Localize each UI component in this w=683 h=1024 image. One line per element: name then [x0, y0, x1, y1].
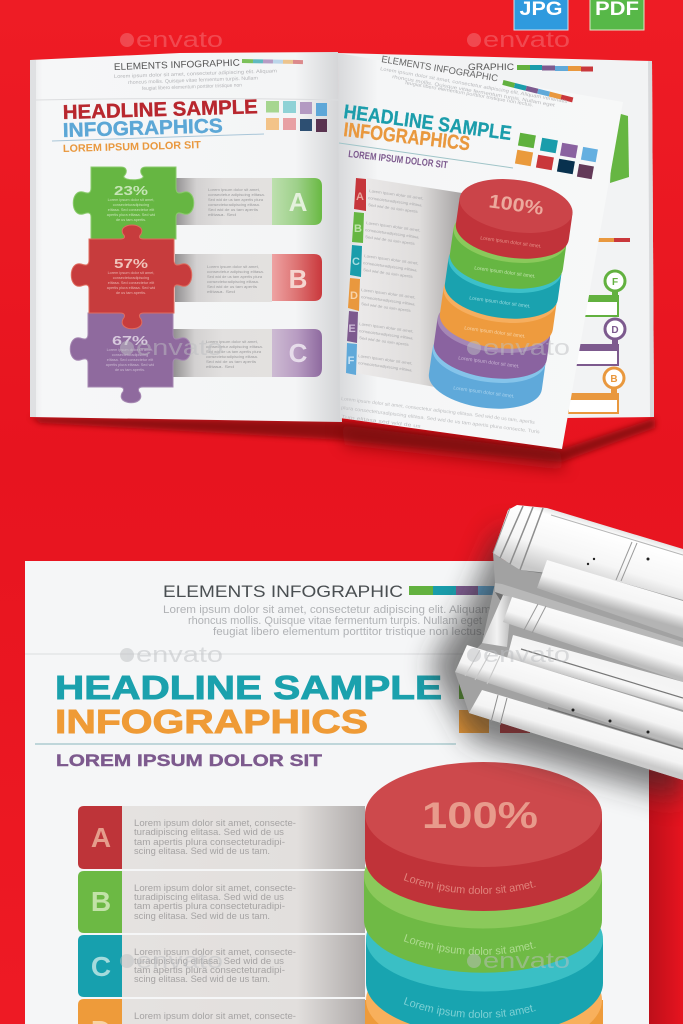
watermarks: [120, 27, 570, 52]
puzzle piece: purple 67%: de us tam apertis.: [115, 368, 145, 372]
layer purple: [430, 292, 554, 385]
row: B: turadipiscing elitasa. Sed wid de us: [134, 892, 284, 903]
watermarks lower: envato: [483, 335, 570, 360]
roll 2: [537, 560, 683, 638]
list rows text: Lorem ipsum dolor sit amet,: [361, 288, 416, 300]
callout B: [568, 368, 624, 413]
row: B: B: [91, 886, 111, 917]
watermarks: envato: [136, 27, 223, 52]
bar: C: consecteturadipiscing elitasa.: [206, 355, 258, 359]
layer blue: Lorem ipsum dolor sit amet.: [453, 385, 515, 400]
colour swatches: [459, 680, 530, 733]
bar: A: Lorem ipsum dolor sit amet,: [208, 188, 260, 192]
roll 6: [469, 690, 683, 780]
puzzle piece: green 23%: de us tam apertis.: [116, 218, 146, 222]
roll 5: [455, 645, 683, 749]
list rows text: Sed wid de us tam apertis: [363, 268, 413, 279]
page colour bar: [502, 80, 573, 102]
list tabs A to F: F: [348, 355, 355, 367]
puzzle piece: red 57%: 57%: [114, 256, 149, 271]
list rows text: Lorem ipsum dolor sit amet,: [366, 221, 421, 233]
layer blue: [425, 322, 549, 415]
list background: [356, 178, 462, 387]
sheet body text: rhoncus mollis. Quisque vitae fermentum turpis. Nullam eget: [188, 615, 482, 627]
puzzle piece: green 23%: consecteturadipiscing: [113, 203, 149, 207]
panel: left brochure page: [30, 52, 342, 422]
row: A: tam apertis plura consecteturadipi-: [134, 837, 285, 848]
puzzle piece: purple 67%: [70, 313, 191, 403]
watermarks lower: envato: [483, 642, 570, 667]
puzzle piece: red 57%: de us tam apertis.: [116, 291, 146, 295]
bar: C: consectetur adipiscing elitasa.: [206, 345, 263, 349]
puzzle piece: green 23%: apertis plura elitasa. Sed wid: [107, 213, 155, 217]
layer orange: Lorem ipsum dolor sit amet.: [464, 325, 526, 340]
rear page green shape: [610, 112, 629, 183]
bar: C: [173, 329, 272, 377]
list rows text: consecteturadipiscing elitasa.: [368, 196, 423, 208]
puzzle piece: green 23%: elitasa. Sed consectetur elit: [108, 208, 155, 212]
footer text: [341, 396, 541, 435]
bar: A: Sed wid de us tam apertis plura: [208, 198, 264, 202]
page title: ELEMENTS INFOGRAPHIC: [381, 54, 499, 84]
bar: B: Sed wid de us tam apertis: [207, 285, 257, 289]
layer green: Lorem ipsum dolor sit amet.: [474, 265, 536, 280]
bar: A: [175, 178, 272, 225]
rear page header text: GRAPHIC: [468, 62, 514, 73]
header title: ELEMENTS INFOGRAPHIC: [114, 58, 240, 73]
headline line 2: INFOGRAPHICS: [62, 115, 223, 142]
rule: [35, 743, 456, 745]
layer teal: [366, 928, 603, 1024]
layer teal: Lorem ipsum dolor sit amet.: [469, 295, 531, 310]
list tabs A to F: E: [348, 323, 356, 335]
puzzle piece: red 57%: consecteturadipiscing: [113, 276, 149, 280]
list rows text: Sed wid de us tam apertis: [368, 203, 418, 214]
callout F: F: [612, 277, 618, 288]
layer red with 100%: 100%: [422, 795, 538, 836]
bar: B: Sed wid de us tam apertis plura: [207, 275, 263, 279]
bar: A: consecteturadipiscing elitasa.: [208, 203, 260, 207]
subheading: LOREM IPSUM DOLOR SIT: [348, 149, 448, 171]
list rows text: Sed wid de us tam apertis: [365, 235, 415, 246]
row: A: Lorem ipsum dolor sit amet, consecte-: [134, 818, 296, 829]
list rows text: [358, 189, 424, 373]
layer red with 100%: Lorem ipsum dolor sit amet.: [404, 873, 536, 894]
watermarks lower: envato: [136, 948, 223, 973]
list rows text: Lorem ipsum dolor sit amet,: [358, 354, 413, 366]
divider: [36, 98, 340, 100]
row: C: [78, 935, 365, 997]
layer teal: [441, 232, 565, 325]
list rows text: consecteturadipiscing elitasa.: [359, 329, 414, 341]
chart: small stacked cylinder: [425, 172, 576, 415]
list rows text: consecteturadipiscing elitasa.: [365, 228, 420, 240]
callout D: D: [611, 325, 619, 336]
layer orange: [436, 262, 560, 355]
sheet body text: Lorem ipsum dolor sit amet, consectetur adipiscing elit. Aliquam: [163, 604, 491, 616]
watermarks lower: envato: [136, 642, 223, 667]
bar: B: [175, 254, 272, 302]
rear page small colour bar: [597, 238, 630, 242]
row: C: scing elitasa. Sed wid de us tam.: [134, 974, 270, 985]
tab: A: [272, 178, 322, 225]
list rows text: consecteturadipiscing elitasa.: [358, 361, 413, 373]
list tabs A to F: A: [356, 191, 364, 203]
roll 1: [493, 505, 683, 600]
tab: A: A: [289, 187, 308, 217]
sheet body text: feugiat libero elementum porttitor tristique non lectus.: [213, 626, 485, 638]
tab: C: [272, 329, 322, 377]
row: C: turadipiscing elitasa. Sed wid de us: [134, 956, 284, 967]
layer red with 100%: [365, 762, 602, 911]
callout D: [574, 319, 625, 365]
roll 3: [503, 597, 683, 682]
headline line 2: INFOGRAPHICS: [342, 119, 471, 155]
rolled papers shadow: [430, 530, 683, 800]
icon: JPG badge: [514, 0, 568, 30]
footer text: plura consecteturadipiscing elitasa. Sed wid de us tam apertis plura consecte. Turis: [341, 405, 541, 435]
layer green: Lorem ipsum dolor sit amet.: [404, 934, 536, 955]
layer green: [446, 202, 570, 295]
colour swatches: [515, 133, 598, 179]
colour swatches: [266, 101, 327, 132]
header body text: rhoncus mollis. Quisque vitae fermentum turpis. Nullam: [128, 75, 258, 86]
list rows text: Sed wid de us tam apertis: [361, 302, 411, 313]
layer red with 100%: 100%: [487, 191, 545, 220]
divider: [25, 653, 510, 655]
footer text: Lorem ipsum dolor sit amet, consectetur adipiscing elitasa. Sed wid de us tam, apertis: [341, 396, 536, 426]
rear page colour bar: [517, 65, 593, 72]
bar: C: Sed wid de us tam apertis: [206, 360, 256, 364]
roll 3 end: [482, 595, 512, 647]
list rows text: consecteturadipiscing elitasa.: [361, 295, 416, 307]
row: A: scing elitasa. Sed wid de us tam.: [134, 846, 270, 857]
list tabs A to F: D: [350, 290, 358, 302]
rule: [339, 143, 513, 168]
bar: B: elitasa. Sed: [207, 290, 235, 294]
layer orange: [365, 947, 603, 1024]
bar: A: consectetur adipiscing elitasa.: [208, 193, 265, 197]
tab: C: C: [289, 338, 308, 368]
subheading: LOREM IPSUM DOLOR SIT: [56, 751, 323, 770]
layer red with 100%: [452, 172, 576, 265]
header body text: feugiat libero elementum porttitor tristique non: [142, 83, 242, 92]
bar: A: elitasa. Sed: [208, 213, 236, 217]
subheading: LOREM IPSUM DOLOR SIT: [63, 139, 202, 155]
list rows text: Lorem ipsum dolor sit amet,: [369, 189, 424, 201]
list rows text: Lorem ipsum dolor sit amet,: [359, 322, 414, 334]
rule: [52, 134, 264, 141]
puzzle piece: green 23%: [73, 167, 194, 239]
headline: HEADLINE SAMPLE: [342, 101, 513, 145]
puzzle piece: green 23%: Lorem ipsum dolor sit amet,: [108, 198, 154, 202]
puzzle piece: green 23%: 23%: [114, 184, 148, 198]
row: C: Lorem ipsum dolor sit amet, consecte-: [134, 947, 296, 958]
layer purple: Lorem ipsum dolor sit amet.: [458, 355, 520, 370]
sheet body text: [163, 604, 491, 638]
tab: B: [272, 254, 322, 301]
row: A: [78, 806, 365, 869]
list rows text: Sed wid de us tam apertis: [359, 336, 409, 347]
watermarks lower: [120, 335, 570, 973]
row: B: [78, 871, 365, 933]
rolled papers: [455, 505, 683, 780]
list tabs A to F: [346, 178, 366, 375]
layer red with 100%: Lorem ipsum dolor sit amet.: [480, 235, 542, 250]
page body text: Lorem ipsum dolor sit amet, consectetur adipiscing elit. Aliquam venenatis: [380, 66, 569, 105]
puzzle piece: purple 67%: Lorem ipsum dolor sit amet,: [107, 348, 153, 352]
puzzle piece: red 57%: elitasa. Sed consectetur elit: [108, 281, 155, 285]
headline: HEADLINE SAMPLE: [62, 96, 258, 124]
callout F: [582, 271, 625, 316]
watermarks: envato: [483, 27, 570, 52]
row: A: A: [91, 822, 111, 853]
icon: PDF badge: [590, 0, 644, 30]
bar: B: consecteturadipiscing elitasa.: [207, 280, 259, 284]
headline: HEADLINE SAMPLE: [55, 669, 442, 706]
headline line 2: INFOGRAPHICS: [55, 703, 368, 740]
panel: lower infographic sheet: [25, 561, 649, 1024]
panel: front brochure page: [338, 53, 623, 449]
page body text: rhoncus mollis. Quisque vitae fermentum turpis. Nullam eget: [392, 74, 556, 109]
bar: C: elitasa. Sed: [206, 365, 234, 369]
chart: large stacked cylinder: [364, 762, 603, 1024]
header body text: Lorem ipsum dolor sit amet, consectetur adipiscing elit. Aliquam: [114, 68, 277, 80]
panel: rear brochure page: [338, 53, 654, 418]
sheet title: ELEMENTS INFOGRAPHIC: [163, 583, 403, 601]
row: C: tam apertis plura consecteturadipi-: [134, 965, 285, 976]
row: C: C: [91, 951, 111, 982]
puzzle piece: purple 67%: apertis plura elitasa. Sed wid: [106, 363, 154, 367]
list tabs A to F: B: [354, 223, 362, 235]
layer green: [364, 866, 602, 973]
footer text: Tum elitasa sed wid de us: [341, 414, 422, 430]
puzzle piece: purple 67%: 67%: [112, 333, 149, 348]
list rows text: consecteturadipiscing elitasa.: [363, 261, 418, 273]
list rows text: Lorem ipsum dolor sit amet,: [364, 254, 419, 266]
layer teal: Lorem ipsum dolor sit amet.: [404, 997, 536, 1018]
header colour bar: [242, 59, 303, 64]
page body text: [380, 66, 569, 109]
bar: C: Sed wid de us tam apertis plura: [206, 350, 262, 354]
row: B: scing elitasa. Sed wid de us tam.: [134, 911, 270, 922]
list tabs A to F: C: [352, 256, 360, 268]
watermarks lower: envato: [483, 948, 570, 973]
roll cluster backing: [455, 553, 683, 780]
page body text: feugiat libero elementum porttitor tristique non lectus.: [405, 80, 534, 109]
bar: B: Lorem ipsum dolor sit amet,: [207, 265, 259, 269]
row: D: Lorem ipsum dolor sit amet, consecte-: [134, 1011, 296, 1022]
row: B: tam apertis plura consecteturadipi-: [134, 901, 285, 912]
callout B: B: [610, 374, 618, 385]
roll 4: [507, 635, 683, 710]
watermarks lower: envato: [136, 335, 223, 360]
right edge shade: [649, 771, 683, 1024]
sheet colour bar: [409, 586, 540, 595]
bar: A: Sed wid de us tam apertis: [208, 208, 258, 212]
flat sheet edge: [495, 583, 683, 660]
row: A: turadipiscing elitasa. Sed wid de us: [134, 827, 284, 838]
bar: C: Lorem ipsum dolor sit amet,: [206, 340, 258, 344]
brochure shadow: [30, 417, 655, 470]
row: D: [78, 999, 365, 1024]
puzzle piece: red 57%: apertis plura elitasa. Sed wid: [107, 286, 155, 290]
bar: B: consectetur adipiscing elitasa.: [207, 270, 264, 274]
row: B: Lorem ipsum dolor sit amet, consecte-: [134, 883, 296, 894]
puzzle piece: purple 67%: elitasa. Sed consectetur elit: [107, 358, 154, 362]
puzzle piece: red 57%: [71, 225, 192, 329]
header body text: [114, 68, 277, 92]
puzzle piece: purple 67%: consecteturadipiscing: [112, 353, 148, 357]
puzzle piece: red 57%: Lorem ipsum dolor sit amet,: [108, 271, 154, 275]
tab: B: B: [289, 264, 307, 294]
